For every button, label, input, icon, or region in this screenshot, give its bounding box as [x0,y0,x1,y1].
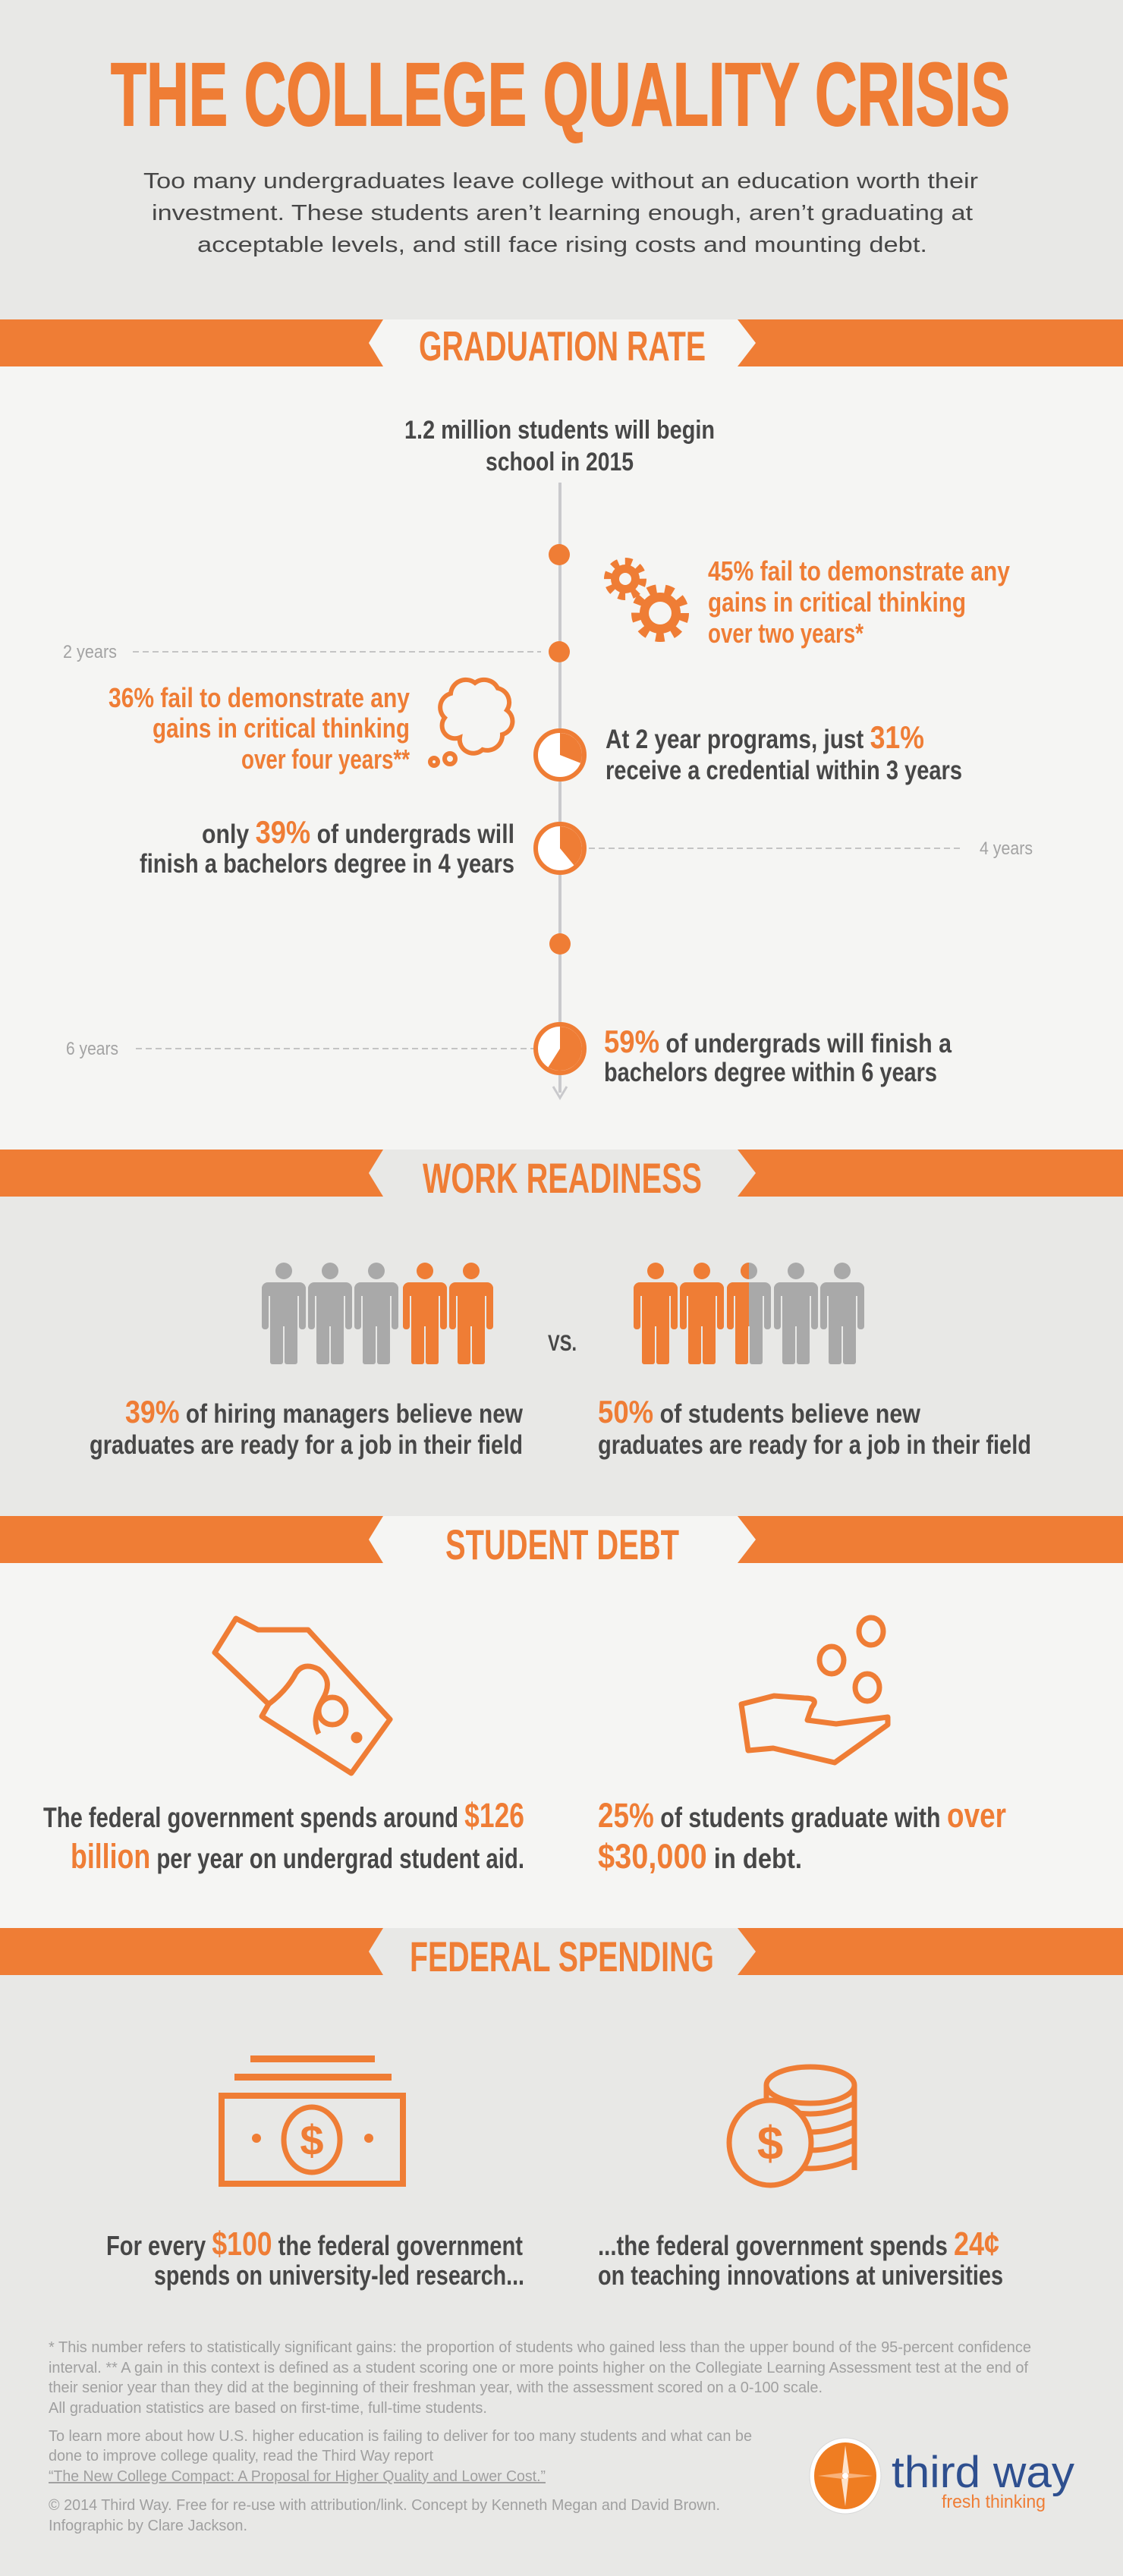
text: 24 cents teaching: ...the federal government spends 24¢ [598,2225,999,2263]
banner: graduation rate: GRADUATION RATE [419,322,706,370]
text: 45%: 45% fail to demonstrate any [708,555,1010,587]
text: 25% debt: $30,000 in debt. [598,1837,802,1876]
text: federal aid $126 billion: The federal government spends around $126 [43,1796,524,1835]
text: 31% [606,719,962,785]
text: $100 research: spends on university-led research... [154,2260,524,2291]
text: 45% [708,555,1010,649]
text: hiring managers 39%: graduates are ready for a job in their field [90,1430,523,1460]
intro text [143,169,978,257]
text: 59%: bachelors degree within 6 years [604,1058,937,1087]
year labels: 6 years [66,1039,118,1059]
learn more text: done to improve college quality, read the Third Way report [49,2448,433,2464]
footnotes: * This number refers to statistically significant gains: the proportion of students who gained less than the upper bound of the 95-percent confidence [49,2339,1031,2356]
text: students 50%: graduates are ready for a job in their field [598,1430,1031,1460]
text: 36%: gains in critical thinking [153,712,410,744]
icon: gears [608,561,684,637]
year labels: 2 years [63,642,117,662]
timeline heading text: school in 2015 [486,448,634,477]
logo: third way: fresh thinking [942,2492,1046,2512]
credits: © 2014 Third Way. Free for re-use with attribution/link. Concept by Kenneth Megan and David Brown. [49,2497,720,2514]
text: 36%: over four years** [241,744,410,775]
icon: hand giving money [215,1618,390,1773]
text: students 50%: 50% of students believe new [598,1394,921,1430]
text: 36% [109,682,410,775]
vs label: VS. [548,1331,577,1356]
banner: work readiness [0,1150,1123,1202]
text: students 50% [598,1394,1031,1460]
text: federal aid $126 billion: billion per year on undergrad student aid. [71,1837,524,1876]
banner: student debt [0,1516,1123,1568]
banner: work readiness: WORK READINESS [423,1154,702,1202]
text: 24 cents teaching: on teaching innovations at universities [598,2260,1003,2291]
icon: coin stack [729,2067,854,2185]
text: 45%: over two years* [708,618,863,649]
text: 39% bachelors: finish a bachelors degree in 4 years [140,849,514,879]
pie: 31% [536,731,584,779]
learn more text [49,2428,752,2485]
pie: 39% [536,824,584,873]
text: hiring managers 39% [90,1394,524,1460]
timeline heading text: 1.2 million students will begin [404,416,715,445]
learn more text: “The New College Compact: A Proposal for Higher Quality and Lower Cost.” [49,2468,546,2485]
text: $100 research: For every $100 the federal government [106,2225,523,2263]
banner: graduation rate [0,319,1123,370]
credits: Infographic by Clare Jackson. [49,2518,247,2534]
intro text: investment. These students aren’t learning enough, aren’t graduating at [152,201,973,225]
timeline dots [549,544,571,955]
icon: cash bill: $ [300,2116,324,2164]
text: hiring managers 39%: 39% of hiring managers believe new [125,1394,524,1430]
pie: 59% [536,1024,584,1073]
people: students [634,1263,864,1364]
intro text: Too many undergraduates leave college without an education worth their [143,169,978,193]
text: $100 research [106,2225,524,2291]
text: federal aid $126 billion [43,1796,524,1876]
text: 36%: 36% fail to demonstrate any [109,682,410,713]
footnotes [49,2339,1031,2417]
credits [49,2497,720,2534]
footnotes: their senior year than they did at the beginning of their freshman year, with the assessment scored on a 0-100 scale. [49,2379,823,2396]
year labels: 4 years [980,838,1033,859]
icon: hand receiving coins [741,1618,888,1763]
intro text: acceptable levels, and still face rising costs and mounting debt. [197,233,927,257]
learn more text: To learn more about how U.S. higher education is failing to deliver for too many students and what can be [49,2428,752,2445]
text: 24 cents teaching [598,2225,1003,2291]
text: 31%: At 2 year programs, just 31% [606,719,924,755]
timeline axis [133,483,964,1098]
banner: federal spending [0,1928,1123,1980]
icon: thought cloud [430,680,512,766]
text: 25% debt: 25% of students graduate with over [598,1796,1006,1835]
logo: third way [810,2438,1074,2514]
icon: coin stack: $ [757,2118,783,2170]
text: 31%: receive a credential within 3 years [606,756,962,785]
text: 59% [604,1024,952,1087]
banner: student debt: STUDENT DEBT [445,1521,679,1568]
text: 39% bachelors: only 39% of undergrads will [202,814,514,850]
timeline heading text [404,416,715,477]
footnotes: All graduation statistics are based on first-time, full-time students. [49,2400,487,2417]
text: 39% bachelors [140,814,514,879]
logo: third way: third way [892,2448,1074,2497]
text: 25% debt [598,1796,1006,1876]
footnotes: interval. ** A gain in this context is defined as a student scoring one or more points higher on the Collegiate Learning Assessment test at the end of [49,2360,1028,2376]
year labels [63,642,1033,1059]
icon: cash bill [222,2055,403,2184]
text: 59%: 59% of undergrads will finish a [604,1024,952,1059]
text: 45%: gains in critical thinking [708,587,966,618]
people: hiring managers [262,1263,493,1364]
banner: federal spending: FEDERAL SPENDING [410,1933,714,1980]
